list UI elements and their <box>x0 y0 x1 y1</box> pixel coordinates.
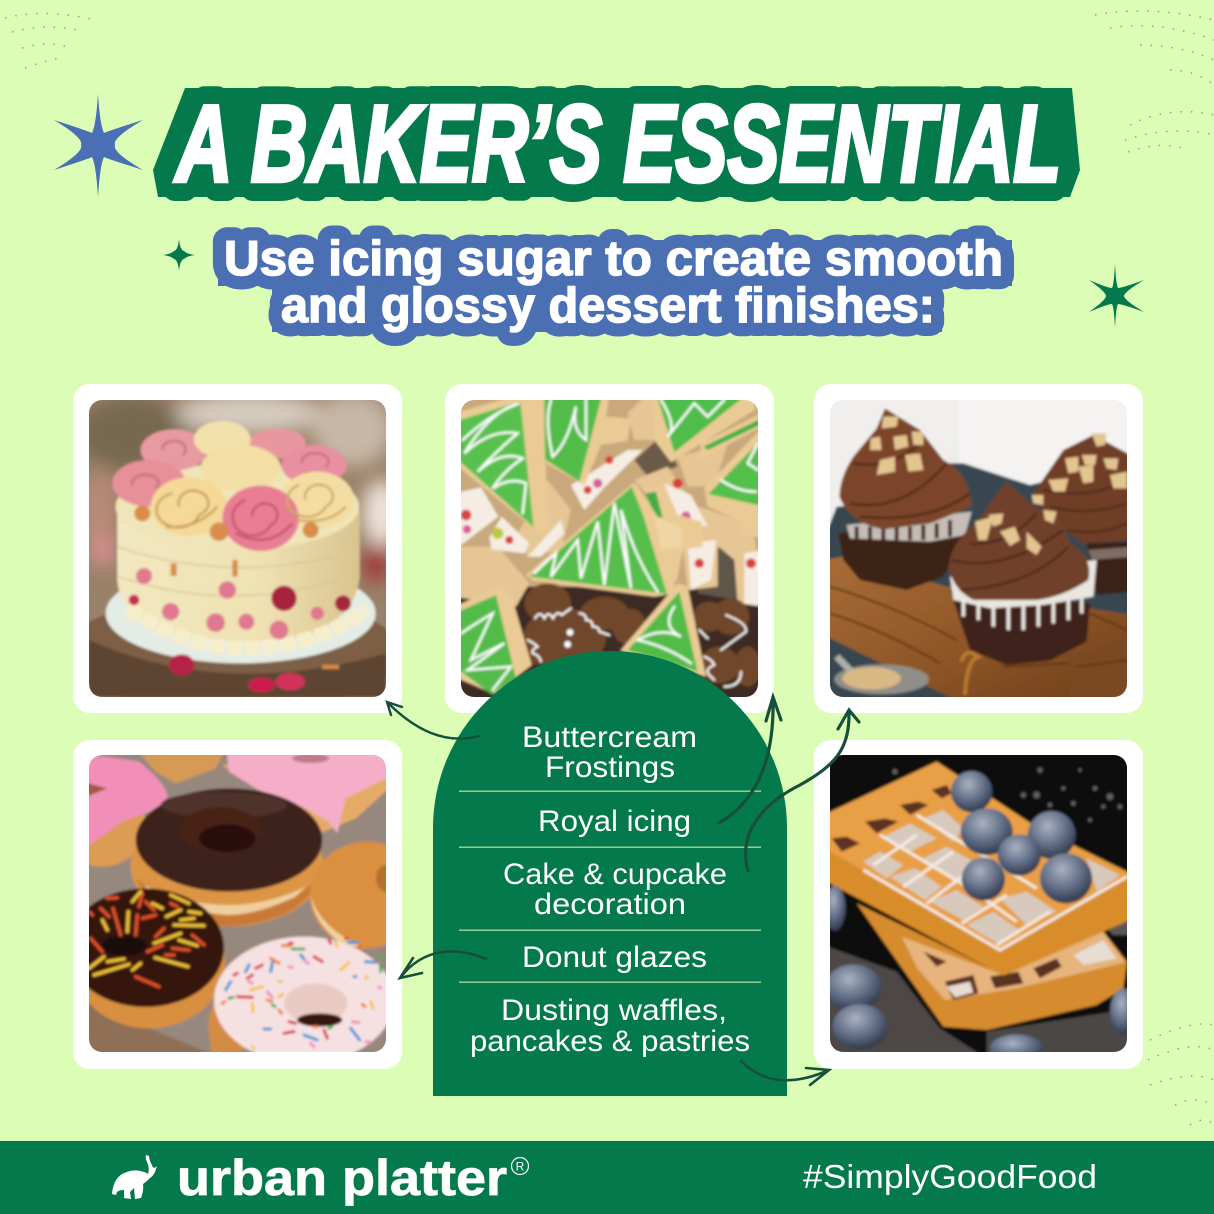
roses <box>112 421 354 551</box>
donut: top middle <box>140 755 224 784</box>
list divider 3 <box>459 930 761 931</box>
sprinkled pieces <box>454 450 765 607</box>
list divider 1 <box>459 790 761 792</box>
registered mark: R <box>516 1160 525 1174</box>
tree cookies <box>454 393 765 694</box>
donut: chocolate sprinkles <box>89 886 226 1030</box>
subtitle: and glossy dessert finishes: <box>281 279 935 333</box>
blueberries <box>824 771 1137 1062</box>
subtitle: and glossy dessert finishes: <box>281 279 935 333</box>
donut: pink top right <box>222 755 386 834</box>
arrow: cake decoration to cupcakes <box>746 710 859 871</box>
list divider 2 <box>459 846 761 848</box>
list text: Buttercream Frostings: Buttercream <box>522 721 697 754</box>
list text: Dusting waffles, pancakes & pastries: Dusting waffles, <box>501 994 727 1027</box>
arrow: donut glazes to donuts <box>400 951 486 978</box>
list text: Buttercream Frostings: Frostings <box>545 751 675 784</box>
donut: chocolate glazed <box>131 788 324 927</box>
donut: white sprinkles <box>207 934 386 1052</box>
list text: Dusting waffles, pancakes & pastries: pancakes & pastries <box>470 1025 750 1058</box>
cupcake: left <box>838 408 972 590</box>
list divider 4 <box>459 982 761 983</box>
footer bar <box>0 1141 1214 1214</box>
subtitle: Use icing sugar to create smooth <box>224 232 1003 286</box>
list text: Dusting waffles, pancakes & pastries <box>470 994 750 1058</box>
panel: chocolate cupcakes photo <box>814 384 1143 713</box>
list text: Cake & cupcake decoration: decoration <box>534 888 686 921</box>
sugar cookies behind <box>454 393 765 607</box>
gingerbread <box>523 583 761 687</box>
list text: Royal icing: Royal icing <box>538 805 691 838</box>
icon: elephant logo <box>112 1155 157 1199</box>
icon: blue sparkle <box>54 94 143 197</box>
waffle: upper <box>823 762 1134 976</box>
list text: Cake & cupcake decoration: Cake & cupcake <box>503 858 727 891</box>
panel: green arch list <box>433 651 787 1096</box>
list text: Cake & cupcake decoration <box>503 858 727 921</box>
arrow: dusting to waffles <box>741 1061 829 1085</box>
cupcake: back right <box>1033 435 1134 595</box>
registered mark <box>512 1158 528 1174</box>
cupcake: front <box>948 482 1097 695</box>
panel: buttercream cake photo <box>62 384 402 713</box>
piped icing <box>461 400 758 690</box>
list text: Buttercream Frostings <box>522 721 697 784</box>
hashtag: #SimplyGoodFood <box>803 1158 1097 1195</box>
arrow: royal icing to cookies <box>719 697 781 823</box>
waffle: lower <box>857 903 1127 1030</box>
chopped nuts <box>870 417 1127 555</box>
panel: waffles photo <box>814 740 1143 1069</box>
icon: small green sparkle <box>163 239 195 271</box>
piped border <box>127 608 367 648</box>
list text: Donut glazes: Donut glazes <box>522 941 707 974</box>
brand name: urban platter <box>177 1150 507 1206</box>
arrow: buttercream to cake <box>387 702 479 739</box>
subtitle <box>218 232 1012 333</box>
panel: royal icing cookies photo <box>445 384 774 713</box>
icon: green sparkle right <box>1089 263 1144 328</box>
panel: donuts photo <box>73 740 402 1069</box>
donut: pink top left <box>89 755 169 868</box>
donut: orange right <box>309 840 386 950</box>
subtitle: Use icing sugar to create smooth <box>224 232 1003 286</box>
